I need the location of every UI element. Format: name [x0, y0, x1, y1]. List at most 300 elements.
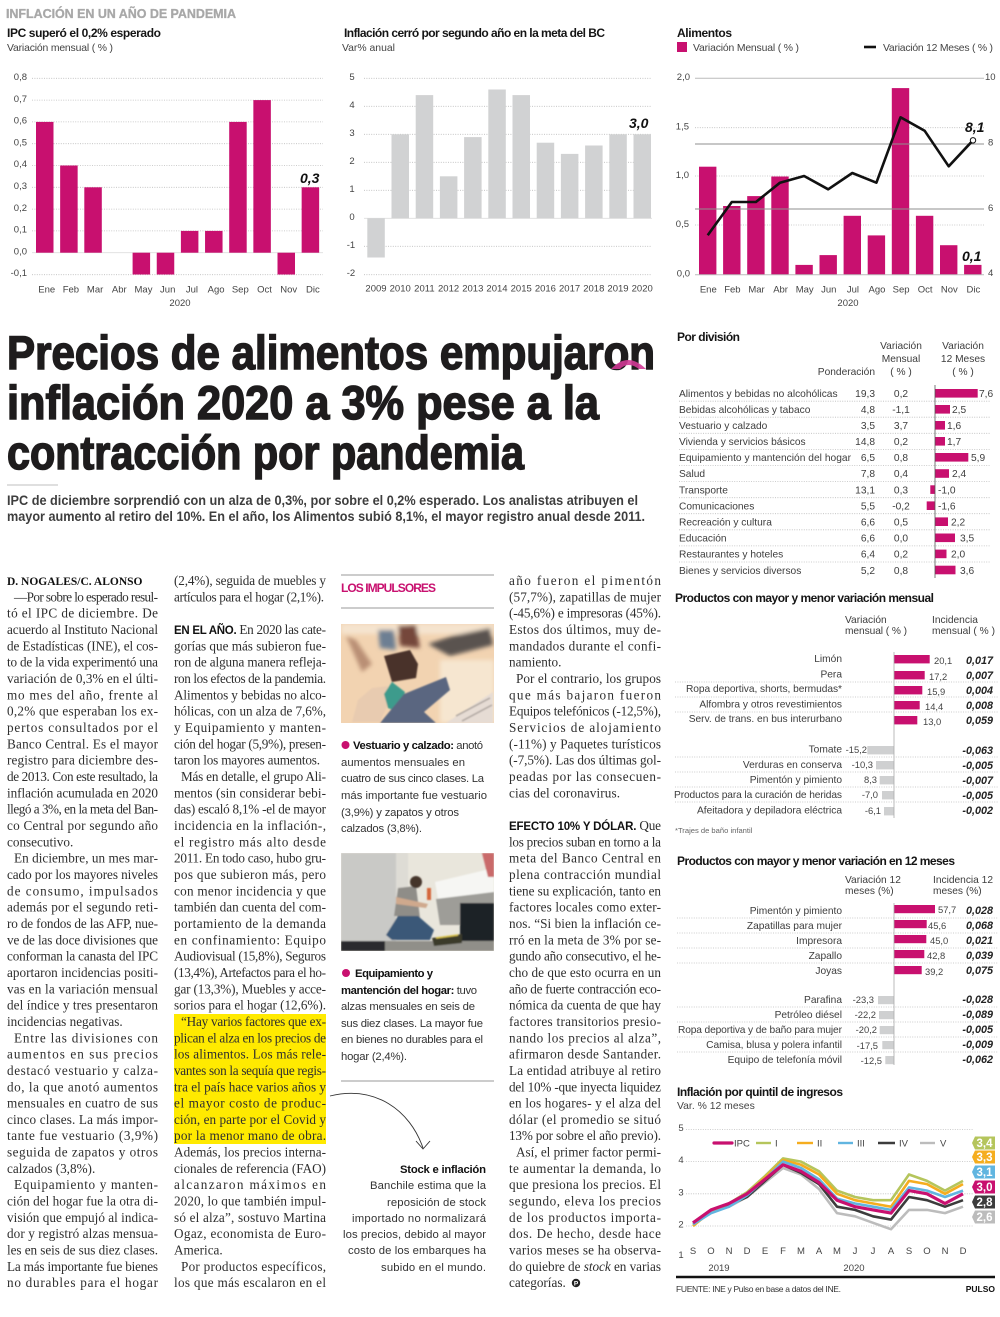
x axis labels: 2020: [837, 298, 859, 309]
article column 1: to de la vida experimentó una: [7, 655, 158, 670]
column headers: Variación: [942, 341, 984, 352]
y axis labels: 0,8: [14, 72, 27, 83]
source line: FUENTE: INE y Pulso en base a datos del INE.: [676, 1284, 841, 1294]
column headers: [818, 341, 985, 378]
row labels: Ropa deportiva, shorts, bermudas*: [686, 684, 842, 695]
x axis labels: Ago: [869, 284, 885, 296]
bar values: -7,0: [862, 789, 878, 800]
y axis labels: [11, 72, 27, 279]
article column 2: el mayor costo de produc-: [174, 1096, 326, 1111]
article column 2: ción del hogar (5,9%), presen-: [174, 736, 326, 751]
article column 2: “Hay varios factores que ex-: [181, 1014, 326, 1029]
article column 3: afirmaron desde Santander.: [509, 1047, 661, 1062]
monthly values: 0,0: [894, 534, 908, 545]
12-month values: 5,9: [971, 453, 985, 464]
bar values: -12,5: [861, 1055, 882, 1066]
end value tags: [972, 1136, 995, 1224]
article column 1: pertos consultados por el: [7, 720, 158, 735]
x axis labels: J: [853, 1246, 858, 1257]
bullet text: vestuario y calzado: cuatro de sus cinco clases. La: [341, 773, 485, 785]
left axis labels: 2,0: [677, 72, 690, 83]
ponderación values: 5,5: [861, 501, 875, 512]
bar values: 57,7: [938, 904, 956, 915]
article column 1: cinco clases. La más impor-: [7, 1112, 158, 1127]
x axis labels: 2018: [583, 284, 604, 294]
article column 3: La entidad atribuye al retiro: [509, 1063, 661, 1078]
row labels: Pimentón y pimiento: [750, 906, 842, 917]
incidence values: 0,008: [966, 700, 993, 712]
article column 3: te aumentar la demanda, lo: [509, 1161, 661, 1176]
callout: stock e inflación: importado no normalizará: [352, 1213, 487, 1225]
legend: II: [817, 1138, 822, 1150]
legend: V: [940, 1138, 947, 1150]
article column 2: Por productos específicos,: [181, 1259, 326, 1274]
x axis labels: Feb: [724, 284, 741, 296]
left axis labels: [676, 72, 690, 280]
article column 2: Audiovisual (15,8%), Seguros: [174, 949, 326, 964]
incidence values: -0,005: [962, 790, 994, 802]
article column 3: de los productos importa-: [509, 1210, 661, 1225]
x axis labels: M: [797, 1246, 805, 1257]
article column 2: sorios para el hogar (12,6%).: [174, 998, 326, 1013]
12-month values: 1,6: [947, 421, 961, 432]
row labels: Vivienda y servicios básicos: [679, 437, 806, 448]
row labels: Serv. de trans. en bus interurbano: [689, 714, 842, 725]
article column 2: ron de alguna manera refleja-: [174, 655, 326, 670]
row labels: Ropa deportiva y de baño para mujer: [678, 1025, 843, 1036]
x axis labels: 2019: [708, 1263, 730, 1274]
legend: I: [775, 1138, 778, 1150]
article column 3: (57,7%), zapatillas de mujer: [509, 589, 662, 604]
article column 1: [7, 576, 159, 1290]
bar values: -17,5: [857, 1040, 878, 1051]
ponderación values: 6,4: [861, 550, 875, 561]
article column 2: (2,4%), seguida de muebles y: [174, 573, 326, 588]
bullet text: vestuario y calzado: aumentos mensuales en: [341, 757, 465, 769]
bar values: -10,3: [852, 759, 873, 770]
article column 3: mandados durante el confi-: [509, 638, 661, 653]
article column 1: cado por los mayores niveles: [7, 867, 158, 882]
x axis labels: 2015: [511, 284, 532, 294]
x axis labels: Abr: [773, 284, 788, 296]
bar values: 20,1: [934, 655, 952, 666]
deck: mayor aumento al retiro del 10%. En el año, los Alimentos subió 8,1%, el mayor registro anual desde 2011.: [7, 509, 645, 524]
article column 3: do quiebre de stock en varias: [509, 1259, 661, 1274]
table title: Productos con mayor y menor variación en 12 meses: [677, 854, 955, 868]
article column 1: aportaron incidencias positi-: [7, 965, 158, 980]
article column 2: alcanzaron máximos en: [174, 1177, 326, 1192]
chart title: Inflación cerró por segundo año en la meta del BC: [344, 26, 605, 40]
bullet text: vestuario y calzado: (3,9%) y zapatos y otros: [341, 807, 459, 819]
article column 2: artículos para el hogar (2,1%).: [174, 589, 324, 604]
article column 2: mentos (sin considerar bebi-: [174, 785, 326, 800]
monthly values: 0,2: [894, 437, 908, 448]
ponderación values: 5,2: [861, 566, 875, 577]
row labels: Bebidas alcohólicas y tabaco: [679, 405, 811, 416]
bullet text: equipamiento: en bienes no durables para el: [341, 1034, 483, 1046]
article column 2: los alimentos. Los más rele-: [174, 1047, 326, 1062]
article column 1: ción del hogar fue la otra di-: [7, 1194, 158, 1209]
table title: Productos con mayor y menor variación mensual: [675, 591, 934, 605]
article column 2: en confinamiento: Equipo: [174, 932, 326, 947]
incidence values: 0,068: [966, 920, 993, 932]
article column 1: mensuales en cuatro de sus: [7, 1096, 158, 1111]
headline: [7, 326, 655, 479]
row labels: Alfombra y otros revestimientos: [699, 700, 842, 710]
article column 2: cionales de referencia (FAO): [174, 1161, 326, 1176]
series IV: [693, 1165, 963, 1223]
x axis labels: 2016: [535, 284, 556, 294]
article column 1: seguida de zapatos y otros: [7, 1145, 158, 1160]
x axis labels: J: [871, 1246, 876, 1257]
value callouts: 0,1: [962, 248, 982, 264]
left axis labels: 1,0: [676, 170, 689, 181]
article column 2: EN EL AÑO. En 2020 las cate-: [174, 622, 326, 637]
value callout: 0,3: [300, 170, 320, 186]
article column 3: dólar (el promedio se situó: [509, 1112, 661, 1127]
x axis labels: Feb: [63, 284, 79, 296]
photo: card payment: [341, 624, 494, 723]
article column 3: plena contracción mundial: [509, 867, 661, 882]
article column 3: los precios suban en torno a la: [509, 834, 661, 849]
article column 3: Servicios de alojamiento: [509, 720, 661, 735]
legend: [714, 1138, 947, 1150]
y axis labels: 1: [678, 1250, 684, 1261]
x axis labels: Mar: [87, 284, 103, 296]
callout: stock e inflación: Banchile estima que la: [370, 1180, 487, 1192]
x axis labels: Mar: [748, 284, 765, 296]
x axis labels: 2009: [365, 284, 387, 294]
incidence values: 0,075: [966, 965, 994, 977]
y axis labels: 4: [678, 1155, 684, 1166]
monthly values: [892, 389, 910, 577]
article column 2: Más en detalle, el grupo Ali-: [181, 769, 326, 784]
article column 3: namiento.: [509, 655, 561, 670]
row labels: [679, 389, 852, 577]
deck: [7, 493, 645, 524]
x axis labels: Nov: [941, 284, 958, 296]
legend: Variación Mensual ( % ): [693, 43, 799, 54]
article column 2: ción, en parte por el Covid y: [174, 1112, 326, 1127]
ponderación values: 4,8: [861, 405, 875, 416]
right axis labels: 10: [985, 72, 996, 83]
value callout: 3,0: [629, 115, 649, 131]
callout: stock e inflación: los precios, debido al mayor: [343, 1229, 486, 1241]
incidence values: -0,063: [962, 745, 993, 757]
article column 3: cias del coronavirus.: [509, 785, 620, 800]
incidence values: 0,039: [966, 950, 993, 962]
article column 1: incidencias negativas.: [7, 1014, 123, 1029]
article column 2: el registro más alto desde: [174, 834, 326, 849]
article column 1: calzados (3,8%).: [7, 1161, 95, 1176]
y axis labels: 0,2: [14, 203, 27, 214]
row labels: Restaurantes y hoteles: [679, 550, 783, 561]
bar values: [846, 655, 952, 816]
legend: Variación 12 Meses ( % ): [883, 43, 993, 54]
column headers: 12 Meses: [941, 354, 985, 365]
x axis labels: [365, 284, 653, 294]
article column 1: Equipamiento y manten-: [14, 1177, 158, 1192]
x axis labels: Ene: [700, 284, 717, 296]
x axis labels: 2019: [607, 284, 629, 294]
article column 2: ron los efectos de la pandemia.: [174, 671, 326, 686]
article column 2: (13,4%), Artefactos para el ho-: [174, 965, 326, 980]
bar values: 45,0: [930, 935, 948, 946]
article column 3: nómica da cuenta de que hay: [509, 998, 661, 1013]
end-of-article mark: P: [574, 1280, 579, 1288]
article column 2: portamiento de la demanda: [174, 916, 326, 931]
article column 2: das) escaló 8,1% -el de mayor: [174, 802, 327, 817]
article column 2: taron los mayores aumentos.: [174, 753, 320, 768]
right axis labels: 8: [988, 138, 993, 148]
arrow to stock callout: [330, 1093, 430, 1149]
incidence values: 0,007: [966, 670, 994, 682]
row labels: Productos para la curación de heridas: [674, 790, 842, 801]
annual bars: [367, 90, 651, 258]
article column 3: dos. De hecho, desde hace: [509, 1226, 661, 1241]
row labels: Tomate: [809, 744, 842, 756]
12-month values: 3,6: [960, 566, 974, 577]
value callouts: [962, 119, 985, 264]
article column 3: año fueron el pimentón: [509, 573, 661, 588]
row labels: Pimentón y pimiento: [750, 775, 842, 786]
article column 1: visión que empujó al indica-: [7, 1210, 158, 1225]
article column 3: (-7,5%). Las dos últimas gol-: [509, 753, 661, 768]
bullet text: equipamiento: [341, 968, 483, 1063]
bullet text: equipamiento: mantención del hogar: tuvo: [341, 985, 477, 997]
article column 3: nando los precios al alza”,: [509, 1030, 661, 1045]
article column 2: Alimentos y bebidas no alco-: [174, 687, 326, 702]
series IPC: [693, 1165, 963, 1223]
bullet text: vestuario y calzado: Vestuario y calzado: anotó: [353, 740, 483, 752]
article column 3: tiene su explicación, tanto en: [509, 883, 661, 898]
y axis labels: -0,1: [11, 268, 27, 279]
row labels: Verduras en conserva: [743, 760, 842, 771]
x axis labels: E: [762, 1246, 768, 1257]
negative bars: [867, 746, 894, 815]
ponderación values: 6,6: [861, 518, 875, 528]
incidence values: -0,002: [962, 805, 993, 817]
callout: stock e inflación: [343, 1164, 487, 1274]
x axis labels: 2017: [559, 284, 580, 294]
row labels: Limón: [814, 654, 842, 665]
monthly values: 0,8: [894, 566, 908, 577]
article column 3: varios meses se ha observa-: [509, 1243, 661, 1258]
12-month values: 1,7: [947, 437, 961, 448]
x axis labels: 2020: [169, 298, 191, 309]
x axis labels: 2010: [390, 284, 411, 294]
12-month values: 3,5: [960, 534, 974, 545]
article column 2: America.: [174, 1243, 223, 1258]
row labels: Comunicaciones: [679, 501, 754, 512]
bar values: 42,8: [927, 950, 945, 961]
y axis labels: 4: [349, 100, 355, 111]
article column 3: 13% por sobre el año previo).: [509, 1128, 661, 1143]
y axis labels: 0: [349, 212, 355, 223]
x axis labels: N: [942, 1246, 949, 1257]
chart: inflation by income quintile: [677, 1085, 995, 1274]
monthly bars: [36, 100, 319, 274]
x axis labels: Ene: [38, 284, 55, 296]
article column 2: incidencia en la inflación-,: [174, 818, 326, 833]
x axis labels: F: [780, 1246, 786, 1257]
column headers: [845, 615, 995, 637]
article column 3: EFECTO 10% Y DÓLAR. Que: [509, 818, 661, 833]
monthly values: 0,2: [894, 550, 908, 561]
bar values: -6,1: [865, 805, 881, 816]
chart title: Alimentos: [677, 26, 732, 40]
headline: contracción por pandemia: [7, 426, 525, 479]
row labels: Vestuario y calzado: [679, 421, 768, 432]
end value tags: 3,0: [976, 1182, 992, 1194]
chart title: Inflación por quintil de ingresos: [677, 1085, 843, 1099]
left axis labels: 0,5: [676, 219, 689, 230]
y axis labels: 2: [678, 1220, 684, 1230]
x axis labels: O: [923, 1246, 931, 1257]
x axis labels: Jul: [186, 284, 198, 296]
column headers: meses (%): [845, 886, 894, 897]
end value tags: 3,1: [976, 1167, 993, 1179]
article column 1: les en seis de sus diez clases.: [7, 1243, 158, 1258]
x axis labels: Jun: [821, 284, 836, 296]
monthly values: 0,4: [894, 469, 908, 480]
row labels: Zapatillas para mujer: [747, 921, 843, 932]
article column 1: variación de 0,3% en el últi-: [7, 671, 158, 686]
y axis labels: -1: [347, 240, 355, 251]
x axis labels: D: [744, 1246, 751, 1257]
incidence values: 0,017: [966, 655, 994, 667]
bar values: 8,3: [864, 774, 877, 785]
y axis labels: 0,4: [14, 159, 27, 170]
sidebar heading: LOS IMPULSORES: [341, 581, 436, 595]
12-month values: 2,4: [952, 469, 966, 480]
y axis labels: 5: [678, 1123, 684, 1134]
ponderación values: 19,3: [855, 389, 875, 400]
legend: IV: [899, 1138, 909, 1150]
x axis labels: Dic: [306, 284, 320, 296]
article column 2: también dan cuenta del com-: [174, 900, 326, 915]
article column 1: inflación acumulada en 2020: [7, 785, 158, 800]
article column 3: peadas por las consecuen-: [509, 769, 661, 784]
series II: [693, 1160, 963, 1226]
column headers: [845, 875, 993, 897]
article column 3: rró en la meta de 3% por se-: [509, 932, 661, 947]
y axis labels: 0,0: [14, 246, 27, 257]
article column 3: (-45,6%) e impresoras (45%).: [509, 606, 661, 621]
row labels: [674, 654, 842, 816]
article column 3: Así, el primer factor permi-: [516, 1145, 661, 1160]
article column 1: En diciembre, un mes mar-: [14, 851, 158, 866]
x axis labels: S: [906, 1246, 912, 1257]
article column 1: además por el segundo reti-: [7, 900, 158, 915]
article column 3: nos. “Si bien la inflación ce-: [509, 916, 661, 931]
article column 3: cho de que esto ocurra en un: [509, 965, 661, 980]
right axis labels: 4: [988, 268, 993, 279]
x axis labels: O: [707, 1246, 715, 1257]
chart title: IPC superó el 0,2% esperado: [7, 26, 161, 40]
article column 1: —Por sobre lo esperado resul-: [13, 589, 158, 604]
article column 1: registro para diciembre des-: [7, 753, 158, 768]
12-month bars: [927, 389, 978, 574]
legend: [677, 42, 993, 54]
article column 1: Banco Central. Es el mayor: [7, 736, 159, 751]
x axis labels: Nov: [280, 284, 297, 296]
row labels: Bienes y servicios diversos: [679, 566, 801, 577]
column headers: Mensual: [882, 354, 920, 365]
bar values: 45,6: [928, 920, 946, 931]
x axis labels: D: [960, 1246, 967, 1257]
article column 3: factores locales como exter-: [509, 900, 661, 915]
incidence values: -0,028: [962, 994, 993, 1006]
bar values: 15,9: [927, 686, 945, 697]
chart subtitle: Variación mensual ( % ): [7, 43, 113, 54]
article column 1: tante fue vestuario (3,9%): [7, 1128, 158, 1143]
row labels: Zapallo: [809, 951, 842, 962]
x axis labels: Ago: [208, 284, 225, 296]
article column 3: [509, 573, 662, 1290]
article column 3: Por el contrario, los grupos: [516, 671, 661, 686]
x axis labels: N: [726, 1246, 733, 1257]
bar values: -23,3: [853, 994, 874, 1005]
y axis labels: 0,3: [14, 181, 27, 192]
chart: food inflation: [676, 26, 996, 309]
article column 3: factores transitorios presio-: [509, 1014, 661, 1029]
article column 2: gar (13,3%), Muebles y acce-: [174, 981, 326, 996]
row labels: Salud: [679, 469, 705, 480]
incidence values: -0,009: [962, 1039, 993, 1051]
callout: stock e inflación: reposición de stock: [387, 1197, 486, 1209]
article column 1: mo mes del año, frente al: [7, 687, 158, 702]
article column 3: segundo, eleva los precios: [509, 1194, 661, 1209]
bullet text: equipamiento: alzas mensuales en seis de: [341, 1001, 475, 1013]
bar values: 39,2: [925, 966, 943, 977]
12-month values: 7,6: [979, 389, 993, 400]
12-month values: 2,0: [951, 550, 965, 561]
article column 3: categorías.: [509, 1275, 566, 1290]
monthly values: 0,2: [894, 389, 908, 400]
y axis labels: 2: [349, 156, 355, 167]
article column 1: ve de las doce divisiones que: [7, 932, 158, 947]
left axis labels: 0,0: [677, 268, 690, 280]
row labels: [678, 906, 843, 1066]
right axis labels: [985, 72, 996, 279]
article column 2: tra el país hace varios años y: [174, 1079, 326, 1094]
x axis labels: May: [135, 284, 153, 296]
table: por división: [677, 330, 993, 578]
table title: Por división: [677, 330, 740, 344]
article column 2: y Equipamiento y manten-: [174, 720, 326, 735]
chart: annual inflation: [342, 26, 653, 294]
legend: III: [857, 1138, 865, 1150]
column headers: mensual ( % ): [932, 626, 995, 637]
incidence values: 0,021: [966, 935, 993, 947]
brand credit: PULSO: [966, 1284, 995, 1294]
incidence values: [962, 905, 994, 1066]
article column 3: (-11%) y Paquetes turísticos: [509, 736, 661, 751]
positive bars: [894, 655, 930, 724]
incidence values: -0,005: [962, 760, 994, 772]
bar values: -15,2: [846, 744, 867, 755]
ponderación values: 7,8: [861, 469, 875, 480]
monthly values: 0,5: [894, 518, 908, 528]
article column 1: consecutivo.: [7, 834, 73, 849]
article column 1: co Central por segundo año: [7, 818, 158, 833]
article column 1: tó el IPC de diciembre. De: [7, 606, 158, 621]
monthly values: 3,7: [894, 421, 908, 432]
monthly values: -0,2: [892, 501, 910, 512]
article column 3: del 10% -que inyecta liquidez: [509, 1079, 661, 1094]
incidence values: -0,005: [962, 1024, 994, 1036]
